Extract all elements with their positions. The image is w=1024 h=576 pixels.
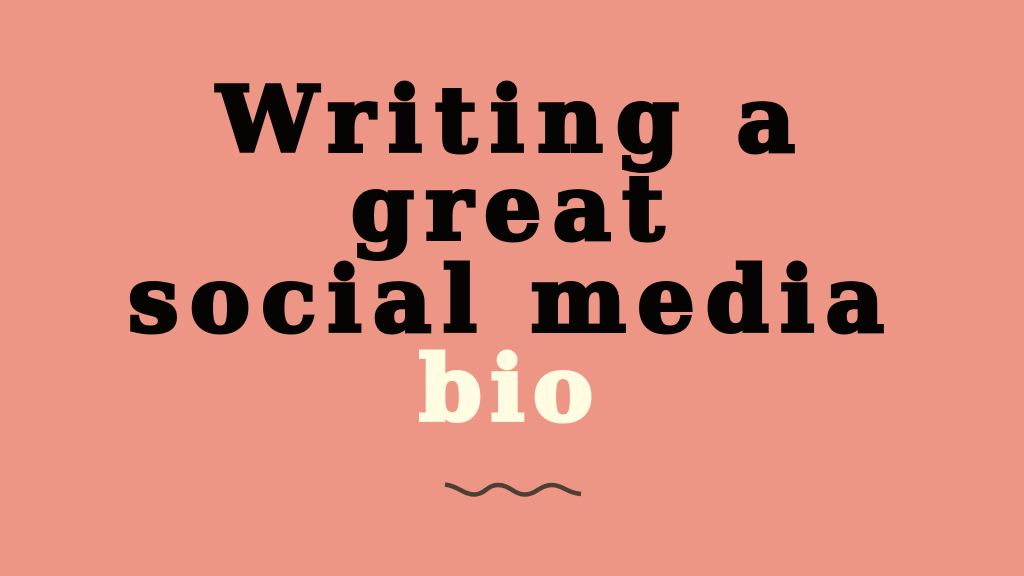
title line: Writing a: Writing a xyxy=(216,67,795,173)
title line: great: great xyxy=(351,155,664,261)
title xyxy=(128,67,884,442)
icon: wavy divider xyxy=(445,484,581,494)
title line: social media: social media xyxy=(128,247,884,353)
title line: bio: bio xyxy=(419,336,593,442)
